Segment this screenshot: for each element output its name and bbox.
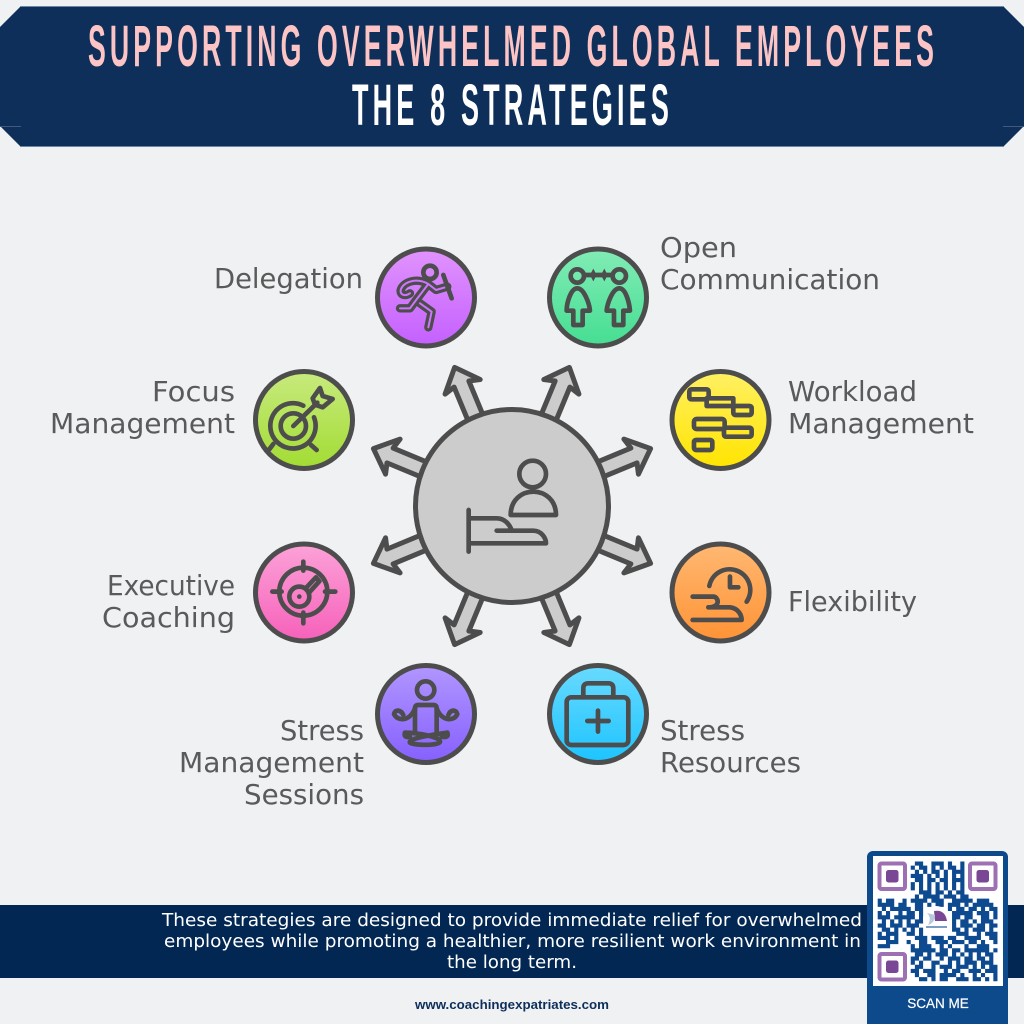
QR finder pattern bottom left — [880, 954, 905, 980]
label: Focus Management — [50, 376, 235, 440]
node: Stress Resources — [550, 666, 801, 779]
node: Stress Management Sessions — [179, 666, 474, 811]
label: Stress Management Sessions: Stress — [280, 715, 364, 747]
label: Focus Management: Management — [50, 408, 235, 440]
QR modules — [878, 864, 997, 979]
label: Workload Management: Management — [788, 408, 974, 440]
label: Executive Coaching: Executive — [107, 570, 235, 602]
node: Delegation — [214, 249, 474, 346]
node: Workload Management — [672, 372, 974, 468]
label: Focus Management: Focus — [152, 376, 235, 408]
node: Flexibility — [672, 544, 917, 641]
label: Stress Management Sessions — [179, 715, 364, 811]
footer band — [0, 905, 1024, 978]
QR code card — [867, 851, 1008, 1024]
label: Workload Management — [788, 376, 974, 440]
footer text — [161, 910, 862, 973]
node: Open Communication — [550, 232, 880, 346]
footer text: employees while promoting a healthier, more resilient work environment in — [164, 931, 861, 952]
label: Open Communication — [660, 232, 880, 296]
label: Open Communication: Communication — [660, 264, 880, 296]
node: Executive Coaching — [102, 544, 352, 641]
QR centre logo — [923, 906, 949, 932]
arrows radiating from centre — [366, 360, 658, 652]
scan me label: SCAN ME — [907, 996, 969, 1011]
label: Delegation: Delegation — [214, 263, 363, 295]
label: Stress Management Sessions: Management — [179, 747, 364, 779]
label: Stress Management Sessions: Sessions — [244, 779, 364, 811]
label: Flexibility: Flexibility — [788, 586, 917, 618]
label: Executive Coaching — [102, 570, 235, 634]
label: Open Communication: Open — [660, 232, 737, 264]
label: Workload Management: Workload — [788, 376, 917, 408]
node: Focus Management — [50, 372, 352, 468]
label: Stress Resources — [660, 715, 801, 779]
label: Executive Coaching: Coaching — [102, 602, 235, 634]
label: Stress Resources: Stress — [660, 715, 745, 747]
central hub with person in bed icon — [416, 410, 608, 602]
website url: www.coachingexpatriates.com — [414, 997, 609, 1012]
footer text: the long term. — [447, 952, 577, 973]
title banner — [0, 6, 1024, 147]
QR finder pattern top left — [880, 864, 905, 889]
label: Stress Resources: Resources — [660, 747, 801, 779]
QR finder pattern top right — [970, 864, 996, 889]
footer text: These strategies are designed to provide immediate relief for overwhelmed — [161, 910, 862, 931]
